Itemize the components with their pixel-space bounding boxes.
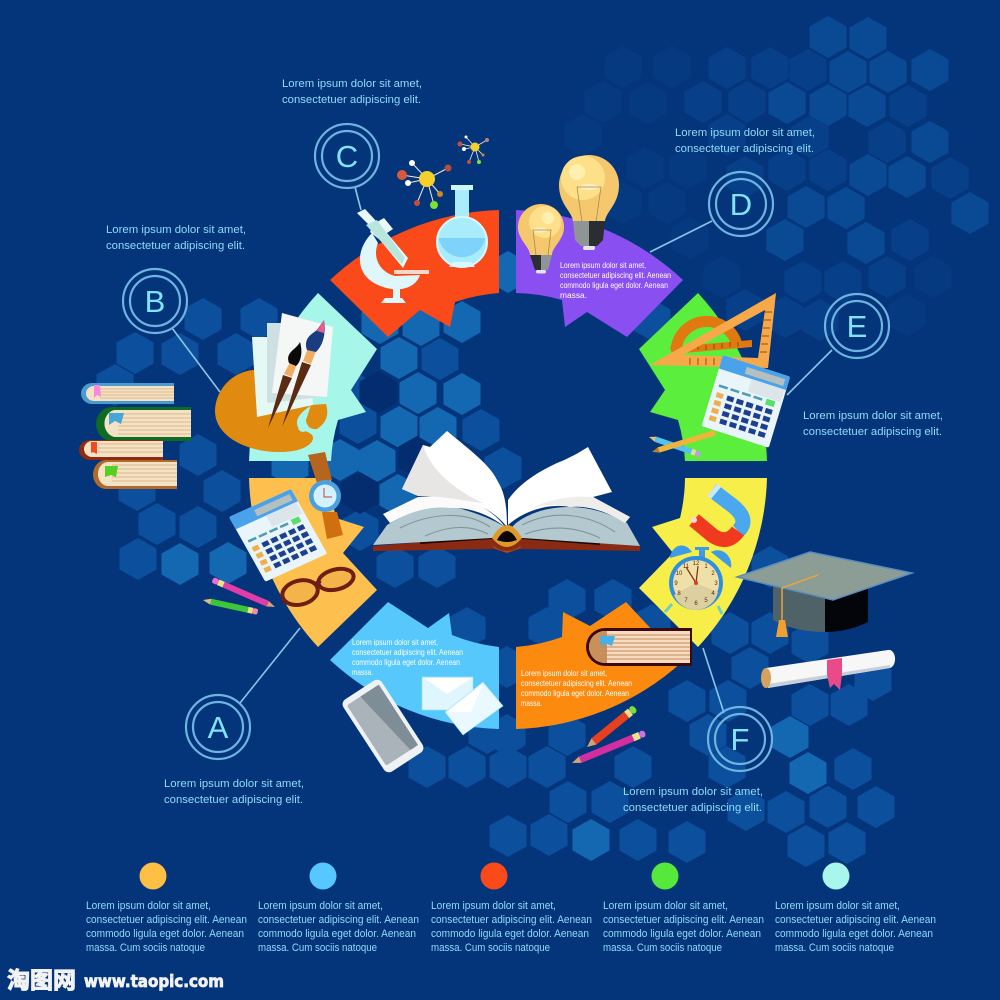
label A: consectetuer adipiscing elit. <box>164 794 303 806</box>
label A <box>164 778 304 806</box>
legend column 5: commodo ligula eget dolor. Aenean <box>775 928 933 940</box>
icon: calculator A <box>229 489 327 582</box>
icon: wrist watch <box>308 452 343 539</box>
text in purple segment <box>560 261 671 300</box>
icon: large molecule <box>397 160 452 209</box>
legend column 1: consectetuer adipiscing elit. Aenean <box>86 914 247 926</box>
badge A: A <box>208 710 229 745</box>
icon: flask <box>437 185 487 267</box>
legend column 3: commodo ligula eget dolor. Aenean <box>431 928 589 940</box>
segment: A amber <box>249 478 377 647</box>
text in light blue segment: massa. <box>352 668 373 677</box>
icon: envelopes <box>422 677 503 735</box>
icon: microscope <box>357 209 429 303</box>
segment: F yellow <box>639 478 767 647</box>
text in light blue segment: Lorem ipsum dolor sit amet, <box>352 638 438 647</box>
icon: alarm clock: 4 <box>711 591 715 597</box>
segment: B light cyan <box>249 293 377 461</box>
badge D: D <box>730 187 752 222</box>
label C: Lorem ipsum dolor sit amet, <box>282 78 422 90</box>
legend column 4: massa. Cum sociis natoque <box>603 942 722 954</box>
legend column 1 <box>86 862 247 954</box>
icon: graduation cap <box>737 552 912 637</box>
segment: C red <box>330 210 499 337</box>
badge B <box>123 269 187 333</box>
icon: alarm clock: 1 <box>704 564 708 570</box>
label F: consectetuer adipiscing elit. <box>623 802 762 814</box>
legend column 5: Lorem ipsum dolor sit amet, <box>775 900 900 912</box>
label B: consectetuer adipiscing elit. <box>106 240 245 252</box>
icon: book on orange segment <box>586 628 692 666</box>
text in orange segment: consectetuer adipiscing elit. Aenean <box>521 679 632 688</box>
text in light blue segment <box>352 638 463 677</box>
icon: alarm clock: 10 <box>676 571 683 577</box>
icon: stack of books <box>79 383 191 489</box>
icon: palette and brushes <box>215 313 333 452</box>
icon: set square <box>650 293 776 368</box>
icon: alarm clock: 12 <box>693 561 700 567</box>
icon: alarm clock: 9 <box>674 581 678 587</box>
label B: Lorem ipsum dolor sit amet, <box>106 224 246 236</box>
label F <box>623 786 763 814</box>
label D: Lorem ipsum dolor sit amet, <box>675 127 815 139</box>
badge F: F <box>731 722 749 757</box>
label F: Lorem ipsum dolor sit amet, <box>623 786 763 798</box>
icon: alarm clock: 6 <box>694 601 698 607</box>
label A: Lorem ipsum dolor sit amet, <box>164 778 304 790</box>
icon: smartphone <box>340 677 426 775</box>
badge D <box>709 172 773 236</box>
legend column 3: Lorem ipsum dolor sit amet, <box>431 900 556 912</box>
badge A <box>186 695 250 759</box>
icon: blue pencil <box>648 434 701 457</box>
legend column 2 <box>258 862 419 954</box>
legend column 4: Lorem ipsum dolor sit amet, <box>603 900 728 912</box>
icon: large light bulb <box>559 155 619 250</box>
legend column 2: commodo ligula eget dolor. Aenean <box>258 928 416 940</box>
icon: alarm clock: 11 <box>683 564 690 570</box>
legend column 5 <box>775 862 936 954</box>
label B <box>106 224 246 252</box>
legend column 2: consectetuer adipiscing elit. Aenean <box>258 914 419 926</box>
icon: yellow pencil <box>651 430 716 455</box>
badge C: C <box>336 139 358 174</box>
watermark: www.taopic.com <box>84 972 224 992</box>
icon: small molecule <box>458 136 489 164</box>
legend column 3 <box>431 862 592 954</box>
label C: consectetuer adipiscing elit. <box>282 94 421 106</box>
text in orange segment <box>521 669 632 708</box>
legend column 5: consectetuer adipiscing elit. Aenean <box>775 914 936 926</box>
watermark <box>7 961 224 995</box>
icon: green pencil <box>202 597 258 615</box>
badge F <box>708 707 772 771</box>
icon: protractor <box>670 321 752 354</box>
text in purple segment: commodo ligula eget dolor. Aenean <box>560 281 668 290</box>
icon: magenta pencil <box>571 730 646 766</box>
label E <box>803 410 943 438</box>
text in light blue segment: commodo ligula eget dolor. Aenean <box>352 658 460 667</box>
label E: consectetuer adipiscing elit. <box>803 426 942 438</box>
text in orange segment: massa. <box>521 699 542 708</box>
legend column 2: Lorem ipsum dolor sit amet, <box>258 900 383 912</box>
badge B: B <box>145 284 165 319</box>
icon: alarm clock: 2 <box>711 571 715 577</box>
watermark: 淘图网 <box>7 961 76 995</box>
icon: small light bulb <box>518 204 564 274</box>
legend column 3: massa. Cum sociis natoque <box>431 942 550 954</box>
legend column 5: massa. Cum sociis natoque <box>775 942 894 954</box>
segment: E green <box>639 293 767 461</box>
text in purple segment: consectetuer adipiscing elit. Aenean <box>560 271 671 280</box>
icon: alarm clock: 3 <box>714 581 718 587</box>
legend column 3: consectetuer adipiscing elit. Aenean <box>431 914 592 926</box>
segment: orange <box>516 602 682 729</box>
icon: alarm clock: 5 <box>704 598 708 604</box>
connector lines <box>172 187 832 713</box>
icon: alarm clock: 8 <box>677 591 681 597</box>
text in orange segment: commodo ligula eget dolor. Aenean <box>521 689 629 698</box>
text in purple segment: massa. <box>560 291 587 300</box>
icon: calculator E <box>702 355 790 448</box>
open book <box>373 431 640 553</box>
icon: glasses <box>279 565 357 609</box>
legend column 1: massa. Cum sociis natoque <box>86 942 205 954</box>
icon: alarm clock <box>665 545 731 614</box>
segment: D purple <box>516 210 683 337</box>
icon: alarm clock: 7 <box>684 598 688 604</box>
legend column 4: consectetuer adipiscing elit. Aenean <box>603 914 764 926</box>
icon: diploma scroll <box>761 650 895 690</box>
legend column 1: Lorem ipsum dolor sit amet, <box>86 900 211 912</box>
badge C <box>315 124 379 188</box>
icon: magnet <box>691 484 743 540</box>
legend column 4: commodo ligula eget dolor. Aenean <box>603 928 761 940</box>
label E: Lorem ipsum dolor sit amet, <box>803 410 943 422</box>
text in light blue segment: consectetuer adipiscing elit. Aenean <box>352 648 463 657</box>
text in purple segment: Lorem ipsum dolor sit amet, <box>560 261 646 270</box>
label C <box>282 78 422 106</box>
icon: red pencil <box>584 705 638 750</box>
badge E <box>825 294 889 358</box>
icon: pink pencil <box>211 577 276 610</box>
text in orange segment: Lorem ipsum dolor sit amet, <box>521 669 607 678</box>
legend column 4 <box>603 862 764 954</box>
label D: consectetuer adipiscing elit. <box>675 143 814 155</box>
legend column 2: massa. Cum sociis natoque <box>258 942 377 954</box>
segment: light blue <box>330 602 499 729</box>
badge E: E <box>847 309 867 344</box>
label D <box>675 127 815 155</box>
legend column 1: commodo ligula eget dolor. Aenean <box>86 928 244 940</box>
